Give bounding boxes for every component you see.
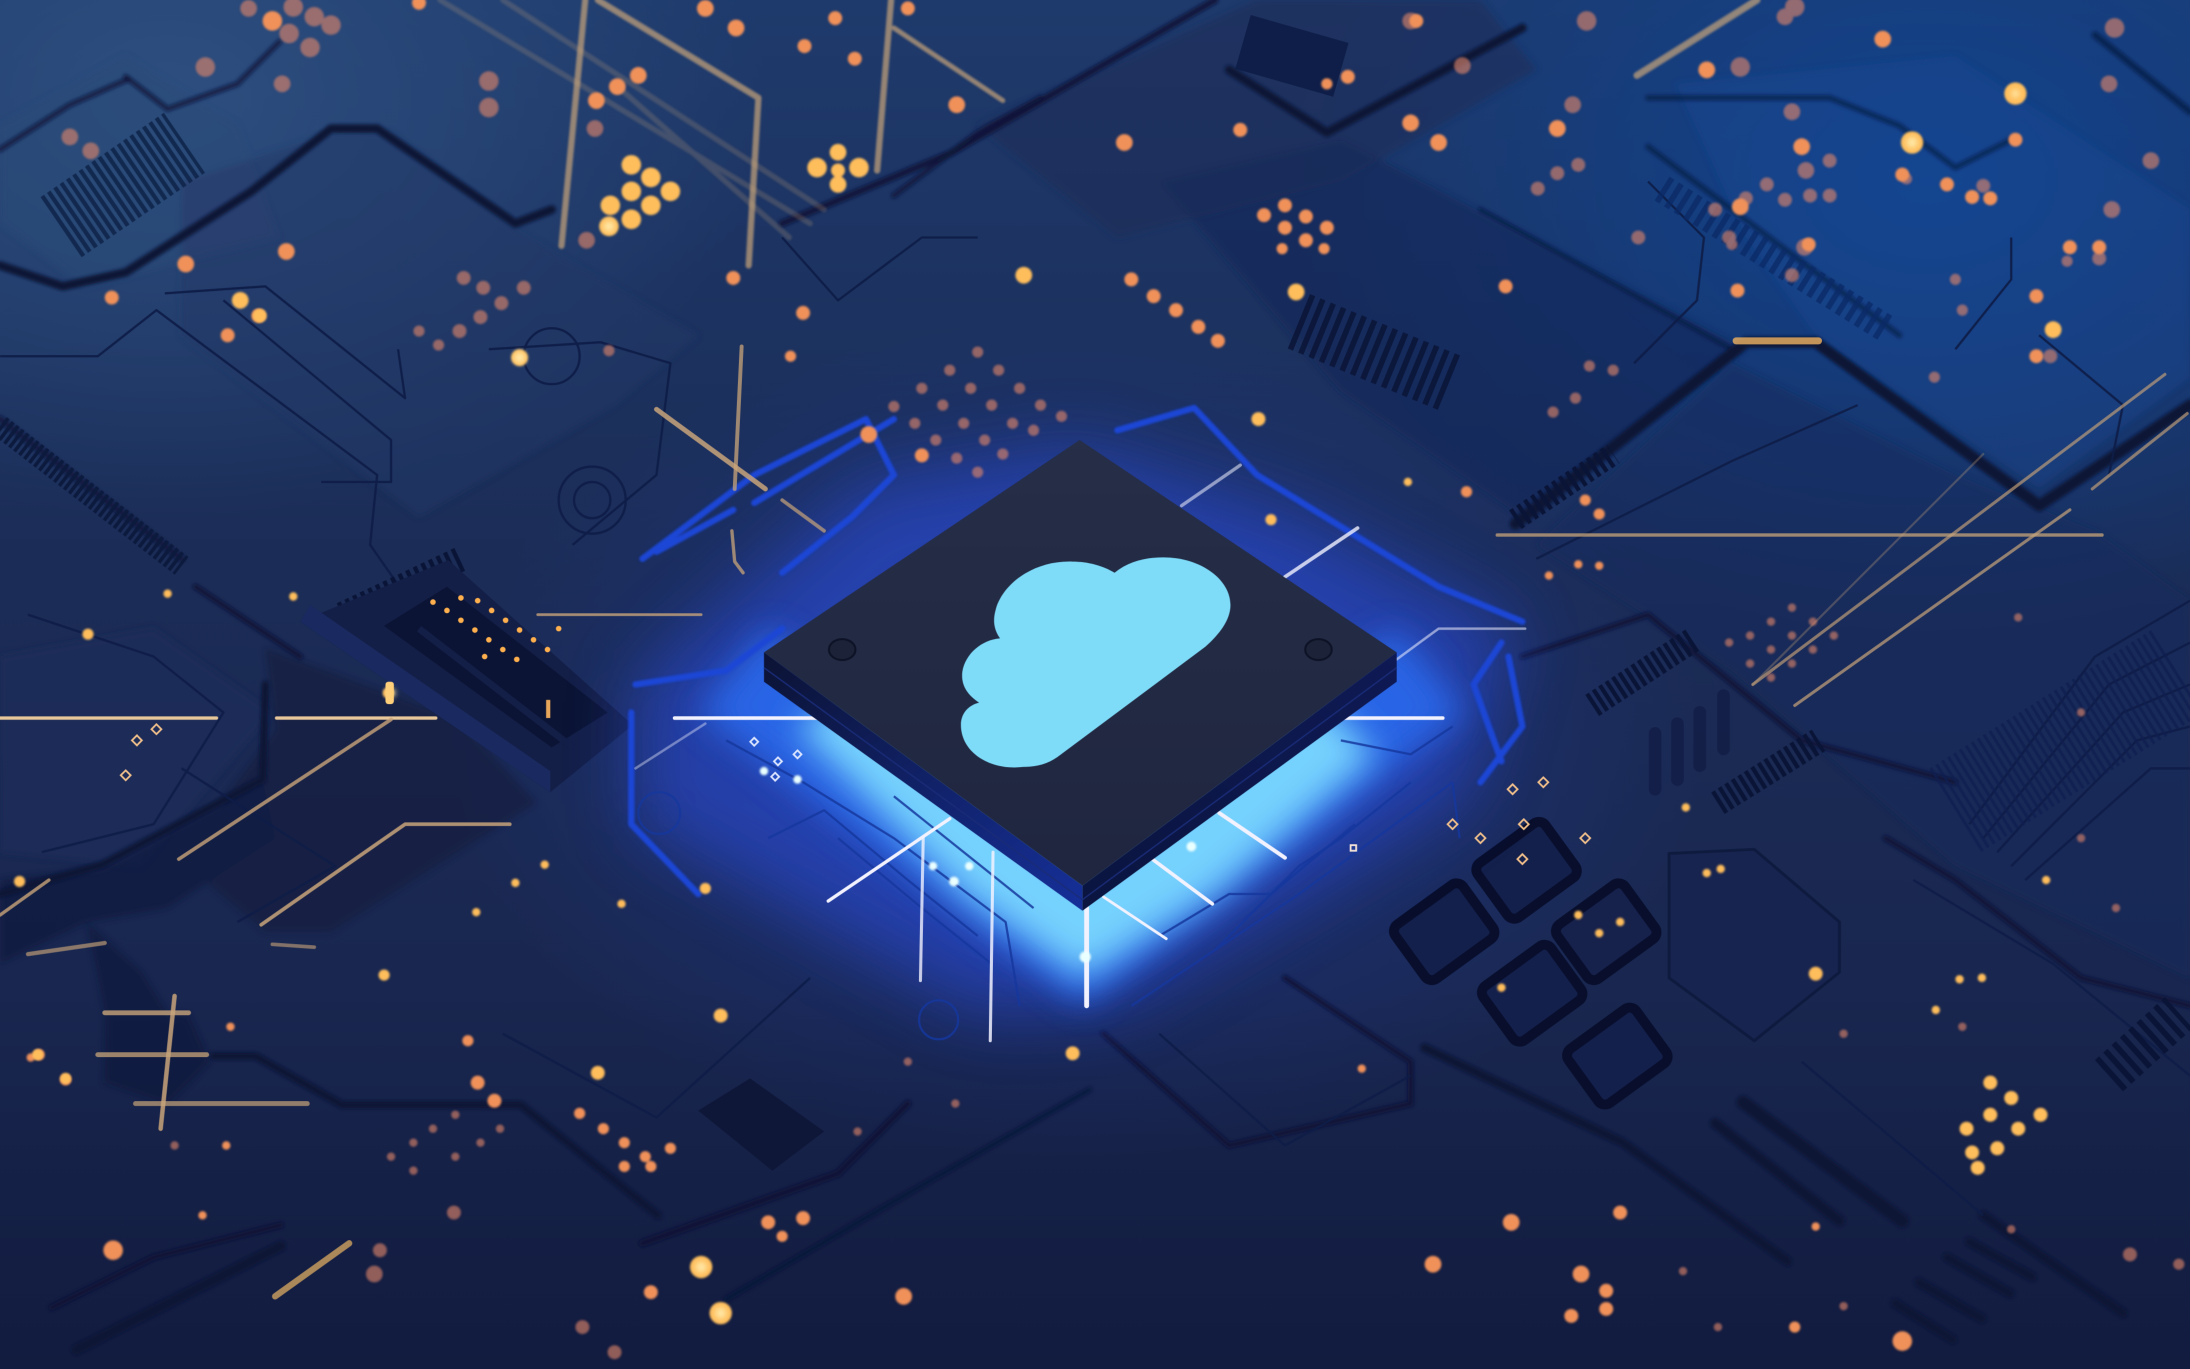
glowing white traces <box>635 465 1525 1041</box>
chip mounting hole: right <box>1305 639 1332 660</box>
cyan dots in glow <box>760 767 1196 962</box>
connector pads: bottom right grid <box>1391 819 1671 1108</box>
thin circuit traces <box>0 182 2190 1215</box>
glowing blue traces around chip <box>631 408 1522 894</box>
microchip with cloud icon <box>764 440 1397 911</box>
icon: cloud <box>961 557 1230 767</box>
dark chip pad: bottom <box>698 1078 824 1171</box>
chip right side face <box>1082 652 1397 911</box>
recessed pits: left board <box>0 648 536 1104</box>
raised board panels <box>0 0 2190 978</box>
chip edge highlight <box>764 668 1397 900</box>
hot centres on brightest dots <box>387 89 2020 1319</box>
slotted openings: right of chip <box>1655 696 1724 789</box>
small pads on connector block <box>385 595 561 718</box>
blue glow under chip <box>635 447 1515 1013</box>
light circuit tracks in glow <box>638 726 1460 1039</box>
hexagonal block: right of pads <box>1669 849 1839 1041</box>
chip mounting hole: left <box>829 639 855 660</box>
heat sink comb pads <box>0 42 2179 1076</box>
chip top face <box>764 440 1397 886</box>
tiny diamond vias <box>121 724 1590 864</box>
connector block: left <box>300 560 633 792</box>
chip left side face <box>764 652 1082 911</box>
